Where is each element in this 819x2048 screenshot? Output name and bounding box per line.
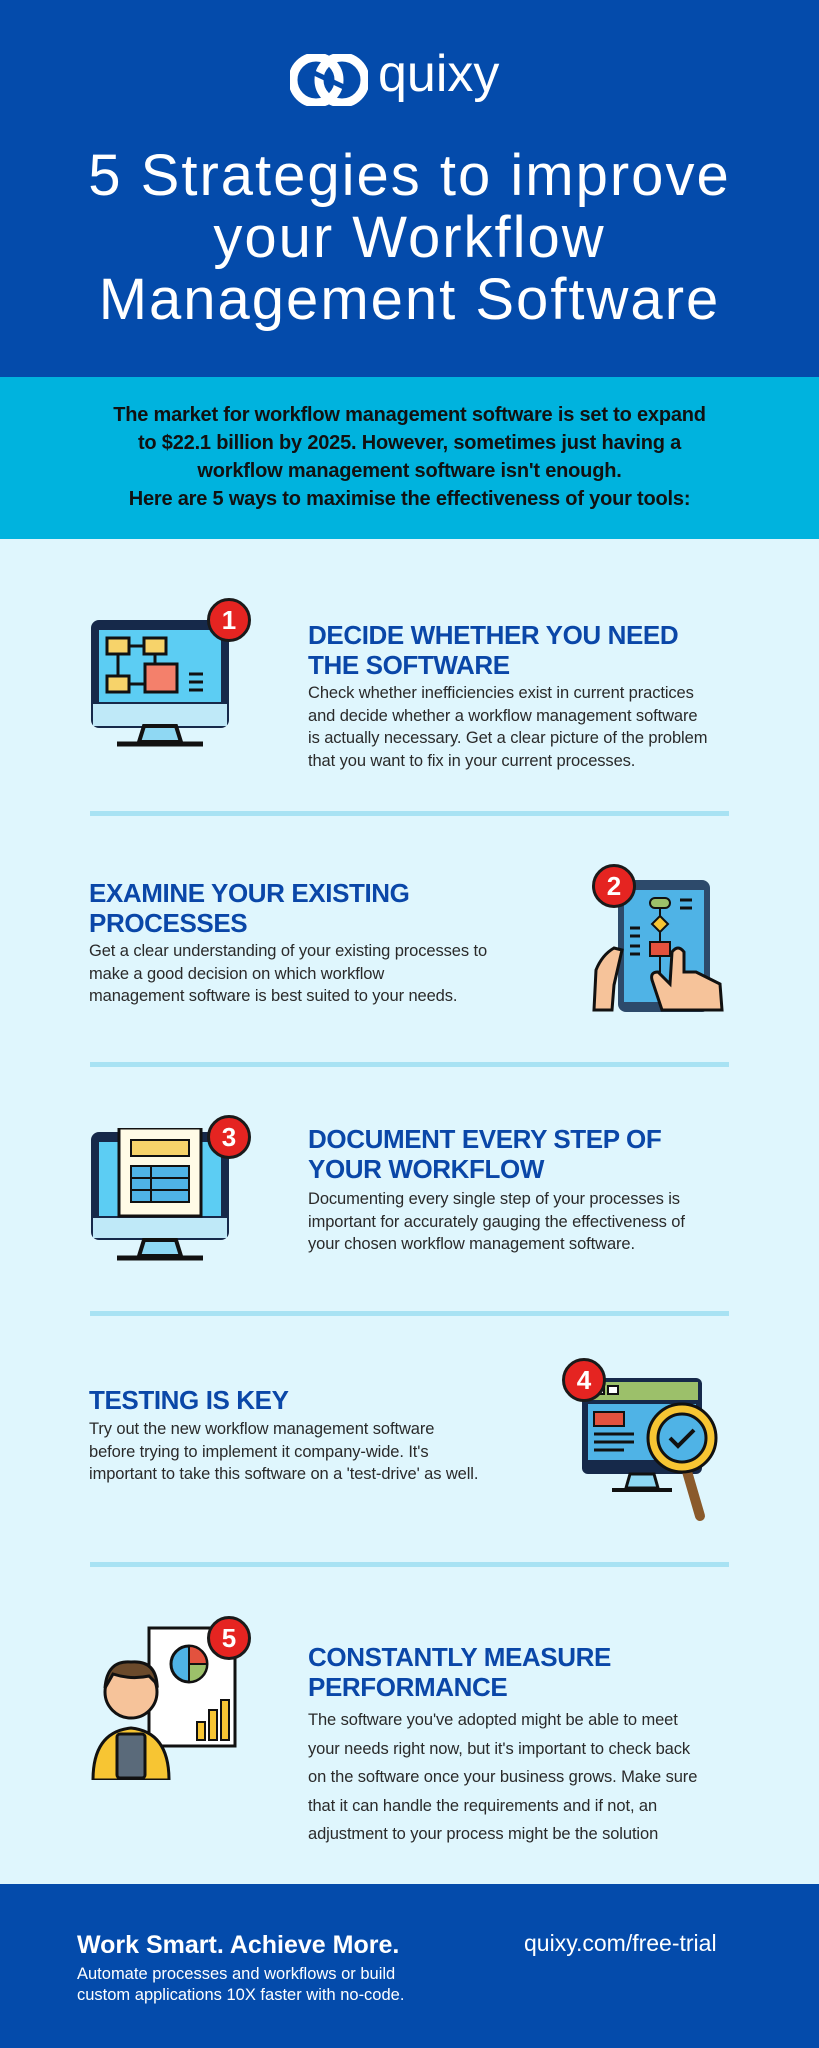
icon: monitor document: 3 [222,1122,236,1152]
icon: monitor document [91,1115,251,1260]
body 1: that you want to fix in your current processes. [308,752,635,770]
section 4 [89,1358,718,1521]
body 2: Get a clear understanding of your existing processes to [89,942,487,960]
icon: monitor flowchart [91,598,251,746]
body 5: that it can handle the requirements and if not, an [308,1796,657,1814]
body 5: The software you've adopted might be able to meet [308,1711,678,1729]
icon: monitor flowchart: 1 [222,605,236,635]
intro text: workflow management software isn't enough. [197,460,622,482]
heading 1: THE SOFTWARE [308,650,510,680]
body 5 [308,1711,697,1843]
footer description: custom applications 10X faster with no-code. [77,1986,404,2004]
heading 1 [308,620,678,680]
intro text: to $22.1 billion by 2025. However, sometimes just having a [138,432,681,454]
section 5 [92,1616,697,1843]
body 3: important for accurately gauging the effectiveness of [308,1212,685,1230]
icon: monitor with magnifier: 4 [577,1365,591,1395]
body 3: Documenting every single step of your processes is [308,1190,680,1208]
icon: tablet with hand: 2 [607,871,621,901]
heading 5: CONSTANTLY MEASURE [308,1642,611,1672]
heading 2: EXAMINE YOUR EXISTING [89,878,410,908]
intro text: Here are 5 ways to maximise the effectiveness of your tools: [129,488,690,510]
intro text [113,404,706,510]
intro text: The market for workflow management software is set to expand [113,404,706,426]
body 5: on the software once your business grows. Make sure [308,1768,697,1786]
section 3 [91,1115,685,1260]
icon: person with chart [92,1616,251,1780]
body 4: before trying to implement it company-wide. It's [89,1442,428,1460]
logo: quixy [378,45,499,103]
footer url: quixy.com/free-trial [524,1930,717,1956]
body 4: important to take this software on a 'test-drive' as well. [89,1465,478,1483]
footer tagline: Work Smart. Achieve More. [77,1931,399,1959]
body 5: adjustment to your process might be the solution [308,1825,658,1843]
body 1: Check whether inefficiencies exist in current practices [308,684,694,702]
header [0,0,819,377]
title: 5 Strategies to improve [88,143,731,208]
body 1: and decide whether a workflow management software [308,706,697,724]
icon: monitor with magnifier [562,1358,718,1521]
heading 3 [308,1124,661,1184]
intro band [0,377,819,539]
heading 1: DECIDE WHETHER YOU NEED [308,620,678,650]
body 3: your chosen workflow management software. [308,1235,635,1253]
heading 4: TESTING IS KEY [89,1385,289,1415]
heading 2: PROCESSES [89,908,247,938]
footer description: Automate processes and workflows or build [77,1965,395,1983]
body 4: Try out the new workflow management software [89,1420,434,1438]
body 1 [308,684,707,770]
body 2 [89,942,487,1005]
body 4 [89,1420,478,1483]
icon: person with chart: 5 [222,1623,236,1653]
footer description [77,1965,404,2004]
heading 5 [308,1642,611,1702]
footer [0,1884,819,2048]
section 1 [91,598,707,770]
title [88,143,731,332]
section 2 [89,864,724,1012]
body 2: management software is best suited to your needs. [89,987,457,1005]
title: Management Software [99,267,720,332]
title: your Workflow [213,205,606,270]
icon: tablet with hand [592,864,724,1012]
heading 3: DOCUMENT EVERY STEP OF [308,1124,661,1154]
body 3 [308,1190,685,1253]
logo [290,45,500,106]
body 5: your needs right now, but it's important to check back [308,1740,690,1758]
body 1: is actually necessary. Get a clear picture of the problem [308,729,707,747]
heading 2 [89,878,410,938]
heading 3: YOUR WORKFLOW [308,1154,544,1184]
heading 5: PERFORMANCE [308,1672,507,1702]
body 2: make a good decision on which workflow [89,964,384,982]
